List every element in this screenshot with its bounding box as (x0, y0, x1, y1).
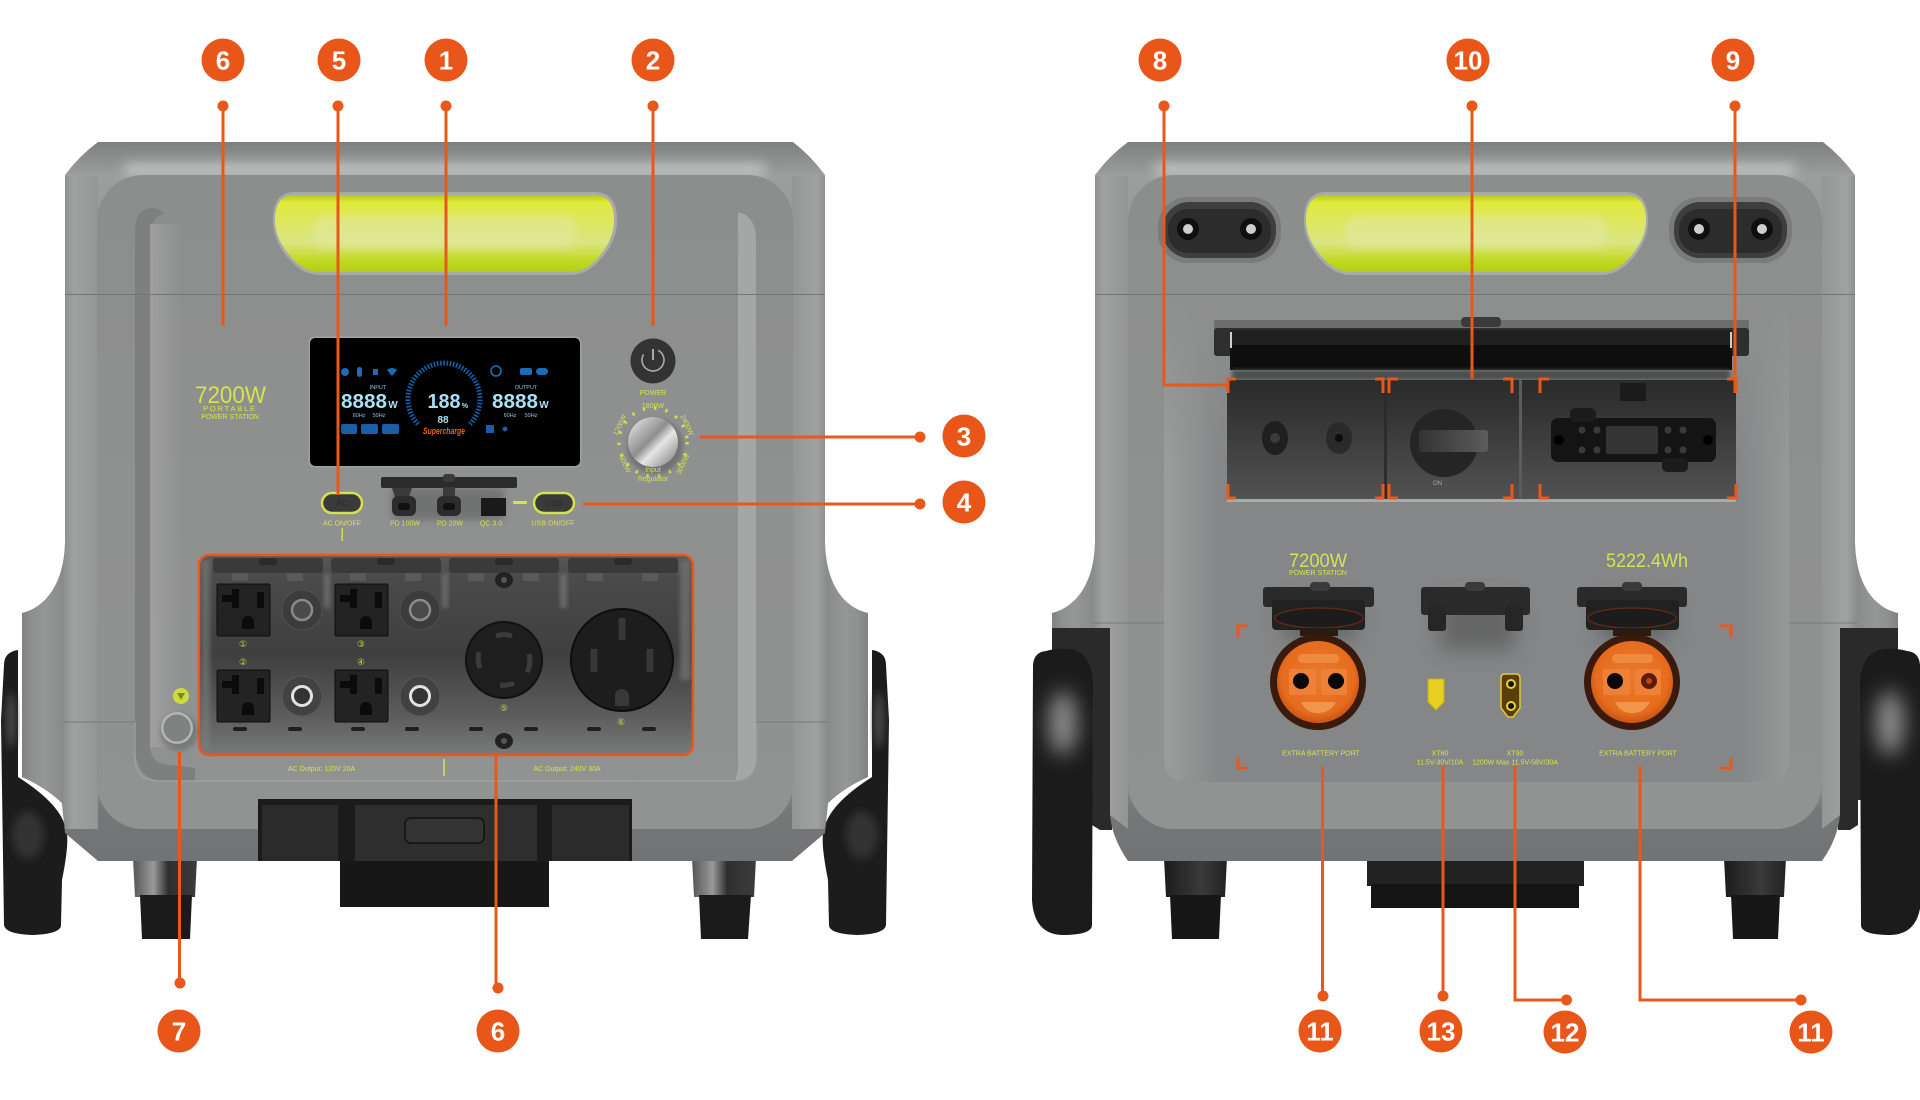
callout 13: 13 (1427, 1016, 1455, 1046)
outlet numbers: ④ (357, 658, 365, 668)
center XT port cover (1421, 582, 1530, 631)
AC on/off button (322, 493, 362, 513)
rear body side right (1822, 176, 1898, 829)
USB on/off button (534, 493, 574, 513)
input regulator knob: 2400W (678, 414, 694, 437)
XT60 port (1428, 679, 1444, 710)
USB ports with cover (381, 474, 527, 520)
rear spec label: 7200W: POWER STATION (1289, 570, 1347, 577)
XT90 port (1501, 674, 1520, 717)
rear port labels: XT90 (1507, 750, 1523, 758)
rear port labels (1282, 750, 1678, 766)
top edge highlight (125, 164, 765, 175)
outlet numbers: ③ (357, 640, 365, 650)
rear port labels: EXTRA BATTERY PORT (1282, 750, 1361, 758)
callout 3 (700, 414, 986, 458)
twist-lock outlet (466, 622, 542, 698)
left compartment ports (1262, 421, 1352, 455)
callout 11 right: 11 (1797, 1018, 1825, 1048)
inner front panel (97, 175, 793, 829)
right battery port cover (1577, 582, 1687, 636)
outlet panel outline (199, 555, 693, 755)
cover shadows (1285, 600, 1670, 650)
device body (22, 142, 868, 861)
input readout: W (388, 400, 398, 411)
AC on/off button: AC (336, 499, 348, 508)
callout 10: 10 (1454, 46, 1482, 76)
input readout: 60Hz (353, 413, 366, 419)
flap cover (1214, 317, 1749, 380)
callout 5 (318, 38, 360, 495)
USB and button labels: PD 100W (390, 520, 420, 528)
gauge and battery percentage: 88 (437, 415, 449, 426)
callout 6 top (202, 38, 244, 326)
output readout: 60Hz (504, 413, 517, 419)
carry handle with green glow (273, 192, 617, 275)
callout 2: 2 (646, 46, 660, 76)
panel edge shading (201, 560, 691, 750)
input readout (341, 385, 398, 419)
left light strip (150, 224, 182, 747)
120V outlets (217, 584, 388, 722)
bottom carry handle lower section (340, 858, 549, 907)
input regulator knob: Input (645, 467, 661, 474)
rear lower housing (1367, 858, 1584, 908)
rear port labels: XT60 (1432, 750, 1448, 758)
input regulator knob: 1800W (642, 403, 664, 410)
callout 8 (1138, 38, 1227, 385)
rear right wheel (1860, 649, 1920, 935)
status icons (341, 366, 548, 377)
callout 5: 5 (332, 46, 346, 76)
USB on/off button: USB (546, 499, 562, 508)
callout 3: 3 (957, 422, 971, 452)
gauge and battery percentage: Supercharge (423, 426, 465, 436)
power button: POWER (640, 390, 666, 397)
rotary switch (1410, 409, 1488, 487)
gauge and battery percentage: 188 (428, 391, 460, 413)
body side shading right (792, 176, 868, 829)
callout 8: 8 (1153, 46, 1167, 76)
input readout: 50Hz (373, 413, 386, 419)
recessed port compartment (1227, 380, 1736, 502)
brand label: 7200W: POWER STATION (201, 414, 259, 421)
rear port labels: 1200W Max 11.5V-58V/30A (1472, 760, 1558, 766)
output readout: 50Hz (525, 413, 538, 419)
AC output labels: AC Output: 120V 20A (288, 766, 355, 773)
callout 12: 12 (1551, 1018, 1579, 1048)
input readout: 8888 (341, 391, 387, 413)
input regulator knob (613, 403, 694, 483)
240V outlet (571, 609, 673, 711)
left eyelet mount (1158, 197, 1281, 263)
USB and button labels: QC 3.0 (480, 520, 502, 528)
USB and button labels (323, 520, 574, 541)
callout 11 left (1298, 766, 1342, 1052)
compartment corner brackets (1228, 379, 1736, 498)
callout 13 (1420, 766, 1462, 1052)
panel: AC outlets (199, 555, 693, 755)
callout 6 top: 6 (216, 46, 230, 76)
icon: left wheel (1, 650, 67, 935)
lower panel outline (135, 722, 756, 781)
gauge and battery percentage: % (462, 403, 469, 410)
input regulator knob: 1200W (613, 413, 629, 437)
panel screws (495, 572, 513, 749)
right extra battery socket (1584, 634, 1680, 730)
brand label: 7200W: 7200W (195, 382, 266, 409)
input regulator knob: 600W (617, 455, 632, 474)
rear left foot (1164, 858, 1227, 939)
icon: front right foot (692, 858, 756, 939)
callout 10 (1446, 38, 1490, 379)
body seam line (65, 294, 825, 295)
rear wheel housing left (1052, 626, 1112, 830)
left extra battery socket (1270, 634, 1366, 730)
callout 7: 7 (172, 1016, 186, 1046)
right vertical highlight band (735, 212, 756, 781)
callout 11 left: 11 (1306, 1016, 1334, 1046)
callout 6 bottom: 6 (491, 1016, 505, 1046)
brand label: 7200W (195, 382, 266, 421)
callout 6 bottom (476, 756, 520, 1052)
outlet numbers: ⑤ (500, 704, 508, 714)
input readout: INPUT (370, 385, 387, 391)
callout 9 (1712, 38, 1754, 393)
callout 7 (158, 752, 200, 1052)
LCD display screen (308, 336, 582, 468)
rear port labels: 11.5V-30V/10A (1417, 760, 1464, 766)
bottom carry handle (258, 799, 632, 861)
body side shading left (22, 176, 98, 829)
callout 2 (632, 38, 674, 326)
outlet numbers: ⑥ (617, 718, 625, 728)
parallel port (1551, 383, 1716, 472)
callout 12 (1515, 766, 1586, 1054)
outlet numbers: ① (239, 640, 247, 650)
rear spec label: 7200W: 7200W (1289, 550, 1348, 572)
rear inner panel (1128, 175, 1822, 829)
callout 1: 1 (439, 46, 453, 76)
icon: right wheel (823, 650, 889, 935)
grounding knob (160, 688, 198, 751)
panel: front view of power station (1, 142, 889, 939)
USB and button labels: USB ON/OFF (532, 520, 574, 528)
rear lower seam lines (1092, 622, 1858, 624)
input regulator knob: Regulator (638, 476, 669, 483)
mode icons (341, 424, 507, 434)
right eyelet mount (1669, 197, 1792, 263)
rear carry handle (1304, 192, 1648, 275)
rear spec label: 5222.4Wh: 5222.4Wh (1606, 550, 1688, 572)
rear wheel housing right (1838, 626, 1898, 830)
AC output labels: AC Output: 240V 30A (533, 766, 601, 773)
callout 4: 4 (957, 488, 972, 518)
rear body side left (1052, 176, 1128, 829)
USB and button labels: AC ON/OFF (323, 520, 361, 528)
rear top edge highlight (1155, 164, 1795, 175)
input regulator knob: 3000W (676, 452, 692, 476)
callout 11 right (1640, 766, 1832, 1054)
rear left wheel (1032, 649, 1093, 935)
output readout: 8888 (492, 391, 538, 413)
port area corner brackets (1238, 626, 1731, 768)
rear recess panel (1164, 296, 1789, 782)
rear device body (1052, 142, 1898, 861)
left battery port cover (1263, 582, 1374, 636)
left recess band (135, 208, 195, 781)
rear seam line (1095, 294, 1855, 295)
outlet covers (213, 558, 678, 608)
USB and button labels: PD 20W (437, 520, 463, 528)
panel: rear view of power station (1032, 142, 1920, 939)
outlet numbers: ② (239, 658, 247, 668)
brand label: 7200W: PORTABLE (203, 404, 257, 413)
rear right foot (1724, 858, 1786, 939)
gauge and battery percentage (408, 363, 480, 436)
output readout: OUTPUT (515, 385, 538, 391)
callout 9: 9 (1726, 46, 1740, 76)
circuit breakers (282, 590, 440, 716)
outlet numbers (239, 640, 625, 728)
outlet indicator lights (233, 727, 656, 731)
output readout (492, 385, 549, 419)
rear port labels: EXTRA BATTERY PORT (1599, 750, 1678, 758)
rotary switch: ON (1433, 481, 1442, 487)
rear recess top fade (1164, 294, 1789, 464)
icon: front left foot (133, 858, 197, 939)
callout 1 (424, 38, 468, 326)
power button (630, 338, 676, 397)
callout 4 (583, 480, 986, 524)
AC output labels (288, 759, 601, 776)
output readout: W (539, 400, 549, 411)
lower seam lines (62, 721, 828, 723)
